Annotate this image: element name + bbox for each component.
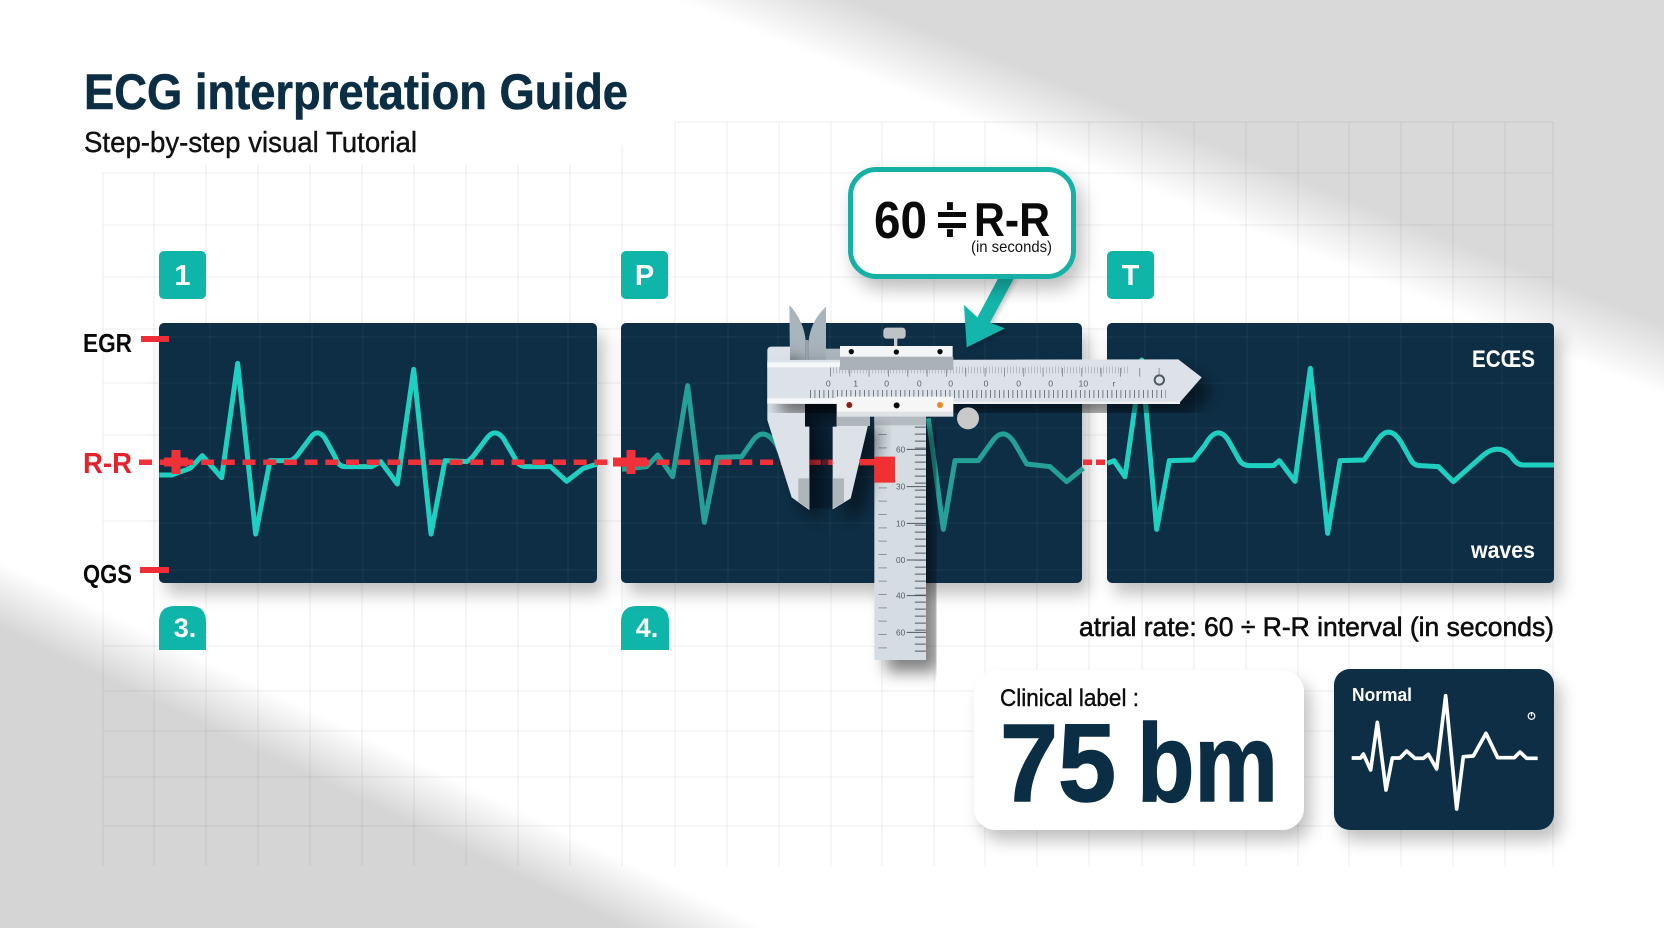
red measurement marker	[859, 457, 895, 483]
formula callout	[850, 170, 1074, 276]
icon: power	[1528, 712, 1535, 719]
heart rate value: bm	[1137, 702, 1278, 825]
caliper slider bottom	[837, 397, 953, 417]
axis label QGS	[83, 559, 169, 589]
card: clinical label	[974, 670, 1304, 830]
subtitle: Step-by-step visual Tutorial	[84, 127, 417, 159]
caliper main beam: 10	[1079, 378, 1088, 388]
R-R dashed measurement line	[139, 450, 1107, 474]
badge T: T	[1122, 260, 1140, 292]
badge P: P	[635, 260, 654, 292]
title: ECG interpretation Guide	[84, 64, 628, 120]
caliper main beam: 0	[1048, 378, 1053, 388]
caliper main beam: 1	[853, 378, 858, 388]
gap between jaws	[805, 404, 837, 508]
cross marker left	[164, 450, 188, 474]
caliper vertical ruler: 00	[896, 555, 906, 565]
caliper vertical ruler	[874, 417, 926, 660]
badge 1: 1	[174, 260, 191, 292]
axis label QGS: QGS	[83, 559, 132, 589]
caliper main beam: 0	[826, 378, 831, 388]
in seconds note: (in seconds)	[971, 239, 1052, 256]
divide sign: ÷	[936, 180, 964, 258]
axis label EGR: EGR	[83, 328, 132, 358]
caliper jaw tips	[798, 416, 870, 509]
caliper thumb wheel	[957, 407, 979, 429]
caliper vertical ruler: 30	[896, 482, 906, 492]
panel: ECG strip 1	[159, 323, 597, 583]
badge T	[1107, 251, 1154, 299]
panel: ECG strip 2	[621, 323, 1082, 583]
clinical label caption: Clinical label :	[1000, 685, 1139, 712]
formula text: 60	[874, 192, 927, 250]
caliper vertical ruler: 60	[896, 444, 906, 454]
cross marker middle	[613, 450, 647, 474]
normal ECG trace	[1352, 696, 1538, 809]
caliper vertical ruler: 40	[896, 591, 906, 601]
caliper main beam: 0	[948, 378, 953, 388]
red line seen between jaws	[810, 460, 833, 465]
caliper upper jaws	[789, 305, 826, 362]
badge 4	[621, 606, 669, 650]
badge 1	[159, 251, 206, 299]
normal label: Normal	[1352, 685, 1412, 705]
caliper main beam: r	[1113, 378, 1116, 388]
axis label R-R: R-R	[83, 448, 132, 480]
caliper slider top	[840, 328, 953, 370]
badge P	[621, 251, 668, 299]
axis label EGR	[83, 328, 169, 358]
badge 4: 4.	[636, 613, 658, 643]
R-R text: R-R	[974, 193, 1050, 246]
caliper fixed jaw and body	[767, 340, 870, 510]
caliper vertical ruler: 10	[896, 518, 906, 528]
caliper main beam: 0	[984, 378, 989, 388]
badge 3: 3.	[174, 613, 196, 643]
heart rate value: 75	[1000, 702, 1116, 825]
ECG trace: strip 2	[622, 386, 1083, 529]
caliper main beam: 0	[917, 378, 922, 388]
formula sentence: atrial rate: 60 ÷ R-R interval (in seconds)	[1079, 612, 1554, 642]
caliper main beam: 0	[884, 378, 889, 388]
caliper main beam	[767, 359, 1202, 404]
caliper	[767, 305, 1202, 660]
arrow from formula to caliper	[964, 275, 1016, 347]
caliper vertical ruler: 60	[896, 627, 906, 637]
ECG trace: strip 3	[1107, 360, 1554, 533]
badge 3	[159, 606, 206, 650]
panel label ECŒS: ECŒS	[1472, 346, 1535, 373]
background grid	[103, 122, 1553, 866]
panel label waves: waves	[1470, 537, 1535, 563]
caliper main beam: 0	[1016, 378, 1021, 388]
panel: ECG strip 3	[1107, 323, 1554, 583]
ECG trace: strip 1	[159, 363, 597, 534]
panel inner grid	[159, 323, 1554, 583]
card: normal rhythm	[1334, 669, 1554, 830]
